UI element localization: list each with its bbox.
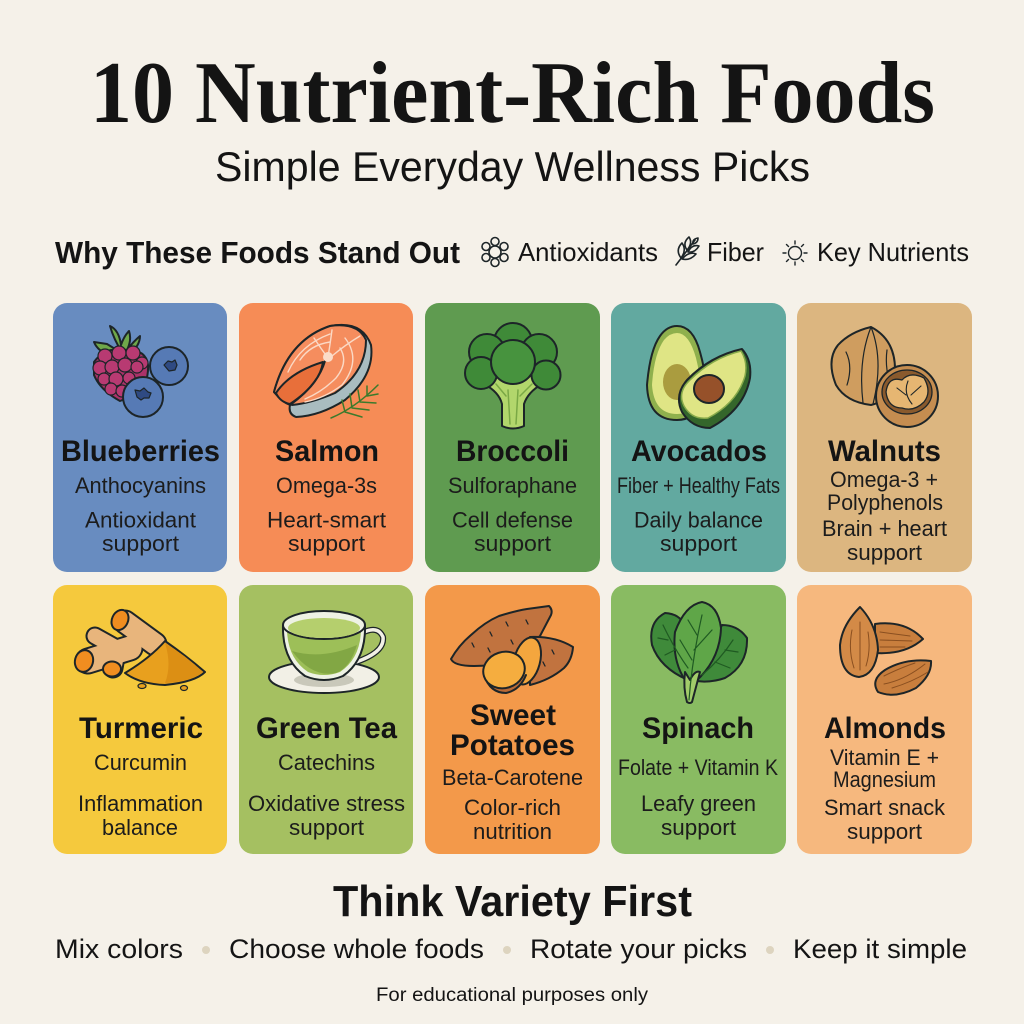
nutrient: fiber and healthy fats: Fiber + Healthy Fats <box>617 473 780 498</box>
card background <box>53 303 227 572</box>
icon: turmeric <box>72 607 205 690</box>
benefit: inflammation balance <box>78 791 203 840</box>
benefit: daily balance support <box>634 508 763 556</box>
panel: sweet potatoes <box>425 585 600 854</box>
tips row: Rotate your picks <box>530 934 747 964</box>
benefit: brain and heart support <box>822 516 948 565</box>
icon: berries <box>93 326 188 417</box>
label: key nutrients: Key Nutrients <box>817 237 969 267</box>
tips row: Mix colors <box>55 934 183 964</box>
panel: avocados <box>611 303 786 572</box>
nutrient: omega-3 and polyphenols <box>827 467 943 515</box>
name: sweet potatoes: Potatoes <box>450 729 575 762</box>
benefit: color-rich nutrition <box>464 795 561 844</box>
panel: green tea <box>239 585 413 854</box>
card background <box>611 585 786 854</box>
icon: key nutrients sun <box>783 241 807 265</box>
name: blueberries: Blueberries <box>61 435 220 468</box>
icon: spinach <box>651 602 747 703</box>
label: antioxidants: Antioxidants <box>518 237 658 267</box>
benefit: leafy green support: support <box>661 815 737 840</box>
tips row: Keep it simple <box>793 934 967 964</box>
panel: blueberries <box>53 303 227 572</box>
icon: tea cup <box>269 611 383 693</box>
name: broccoli: Broccoli <box>456 435 569 468</box>
section: why these foods stand out <box>55 235 969 270</box>
heading: why these foods: Why These Foods Stand Out <box>55 235 460 270</box>
card background <box>611 303 786 572</box>
title: 10 Nutrient-Rich Foods <box>90 45 935 142</box>
icon: almonds <box>840 607 931 695</box>
nutrient: sulforaphane: Sulforaphane <box>448 473 577 498</box>
subtitle: Simple Everyday Wellness Picks <box>215 143 810 190</box>
panel: salmon <box>239 303 413 572</box>
benefit: leafy green support: Leafy green <box>641 791 756 816</box>
icon: walnuts <box>831 327 938 427</box>
icon: broccoli <box>465 323 560 428</box>
benefit: smart snack support: support <box>847 819 923 844</box>
benefit: heart-smart support: Heart-smart <box>267 508 387 532</box>
nutrient: folate and vitamin k: Folate + Vitamin K <box>618 755 778 780</box>
benefit: color-rich nutrition: Color-rich <box>464 795 561 820</box>
nutrient: curcumin: Curcumin <box>94 750 187 775</box>
benefit: antioxidant support <box>85 508 197 556</box>
card background <box>239 585 413 854</box>
tips row: Choose whole foods <box>229 934 484 964</box>
card background <box>797 303 972 572</box>
tips row <box>55 934 967 964</box>
benefit: oxidative stress support: Oxidative stress <box>248 791 405 816</box>
card background <box>425 585 600 854</box>
name: almonds: Almonds <box>824 712 946 745</box>
icon: antioxidants <box>482 238 508 266</box>
benefit: cell defense support: support <box>474 531 552 556</box>
icon: sweet potatoes <box>451 606 573 694</box>
name: sweet potatoes <box>450 699 575 762</box>
footer heading: Think Variety First <box>333 877 692 926</box>
panel: almonds <box>797 585 972 854</box>
benefit: cell defense support <box>452 508 573 556</box>
nutrient: anthocyanins: Anthocyanins <box>75 473 206 498</box>
benefit: heart-smart support: support <box>288 531 366 556</box>
nutrient: vitamin e and magnesium <box>830 745 939 792</box>
nutrient: beta-carotene: Beta-Carotene <box>442 765 583 790</box>
disclaimer: For educational purposes only <box>376 985 649 1006</box>
benefit: color-rich nutrition: nutrition <box>473 819 552 844</box>
benefit: brain and heart support: support <box>847 540 923 565</box>
nutrient: vitamin e and magnesium: Vitamin E + <box>830 745 939 770</box>
benefit: oxidative stress support <box>248 791 405 840</box>
card background <box>53 585 227 854</box>
benefit: daily balance support: support <box>660 531 738 556</box>
card background <box>239 303 413 572</box>
nutrient: catechins: Catechins <box>278 750 375 775</box>
card background <box>797 585 972 854</box>
benefit: antioxidant support: Antioxidant <box>85 508 197 532</box>
label: fiber: Fiber <box>707 237 764 267</box>
name: spinach: Spinach <box>642 712 754 745</box>
nutrient: omega-3s: Omega-3s <box>276 473 377 498</box>
name: walnuts: Walnuts <box>828 435 941 468</box>
panel: broccoli <box>425 303 600 572</box>
benefit: smart snack support <box>824 795 946 844</box>
icon: fiber wheat <box>676 237 699 265</box>
name: salmon: Salmon <box>275 435 379 468</box>
card background <box>425 303 600 572</box>
benefit: smart snack support: Smart snack <box>824 795 946 820</box>
panel: spinach <box>611 585 786 854</box>
benefit: inflammation balance: balance <box>102 815 178 840</box>
panel: turmeric <box>53 585 227 854</box>
name: turmeric: Turmeric <box>79 712 203 745</box>
benefit: brain and heart support: Brain + heart <box>822 516 948 541</box>
name: green tea: Green Tea <box>256 712 397 745</box>
name: avocados: Avocados <box>631 435 767 468</box>
nutrient: vitamin e and magnesium: Magnesium <box>833 767 936 792</box>
benefit: oxidative stress support: support <box>289 815 365 840</box>
benefit: antioxidant support: support <box>102 531 180 556</box>
icon: salmon steak <box>274 325 378 418</box>
name: sweet potatoes: Sweet <box>470 699 556 732</box>
nutrient: omega-3 and polyphenols: Polyphenols <box>827 490 943 515</box>
icon: avocado <box>647 326 750 428</box>
benefit: leafy green support <box>641 791 756 840</box>
benefit: daily balance support: Daily balance <box>634 508 763 532</box>
panel: walnuts <box>797 303 972 572</box>
benefit: heart-smart support <box>267 508 387 556</box>
nutrient: omega-3 and polyphenols: Omega-3 + <box>830 467 938 492</box>
benefit: cell defense support: Cell defense <box>452 508 573 532</box>
benefit: inflammation balance: Inflammation <box>78 791 203 816</box>
